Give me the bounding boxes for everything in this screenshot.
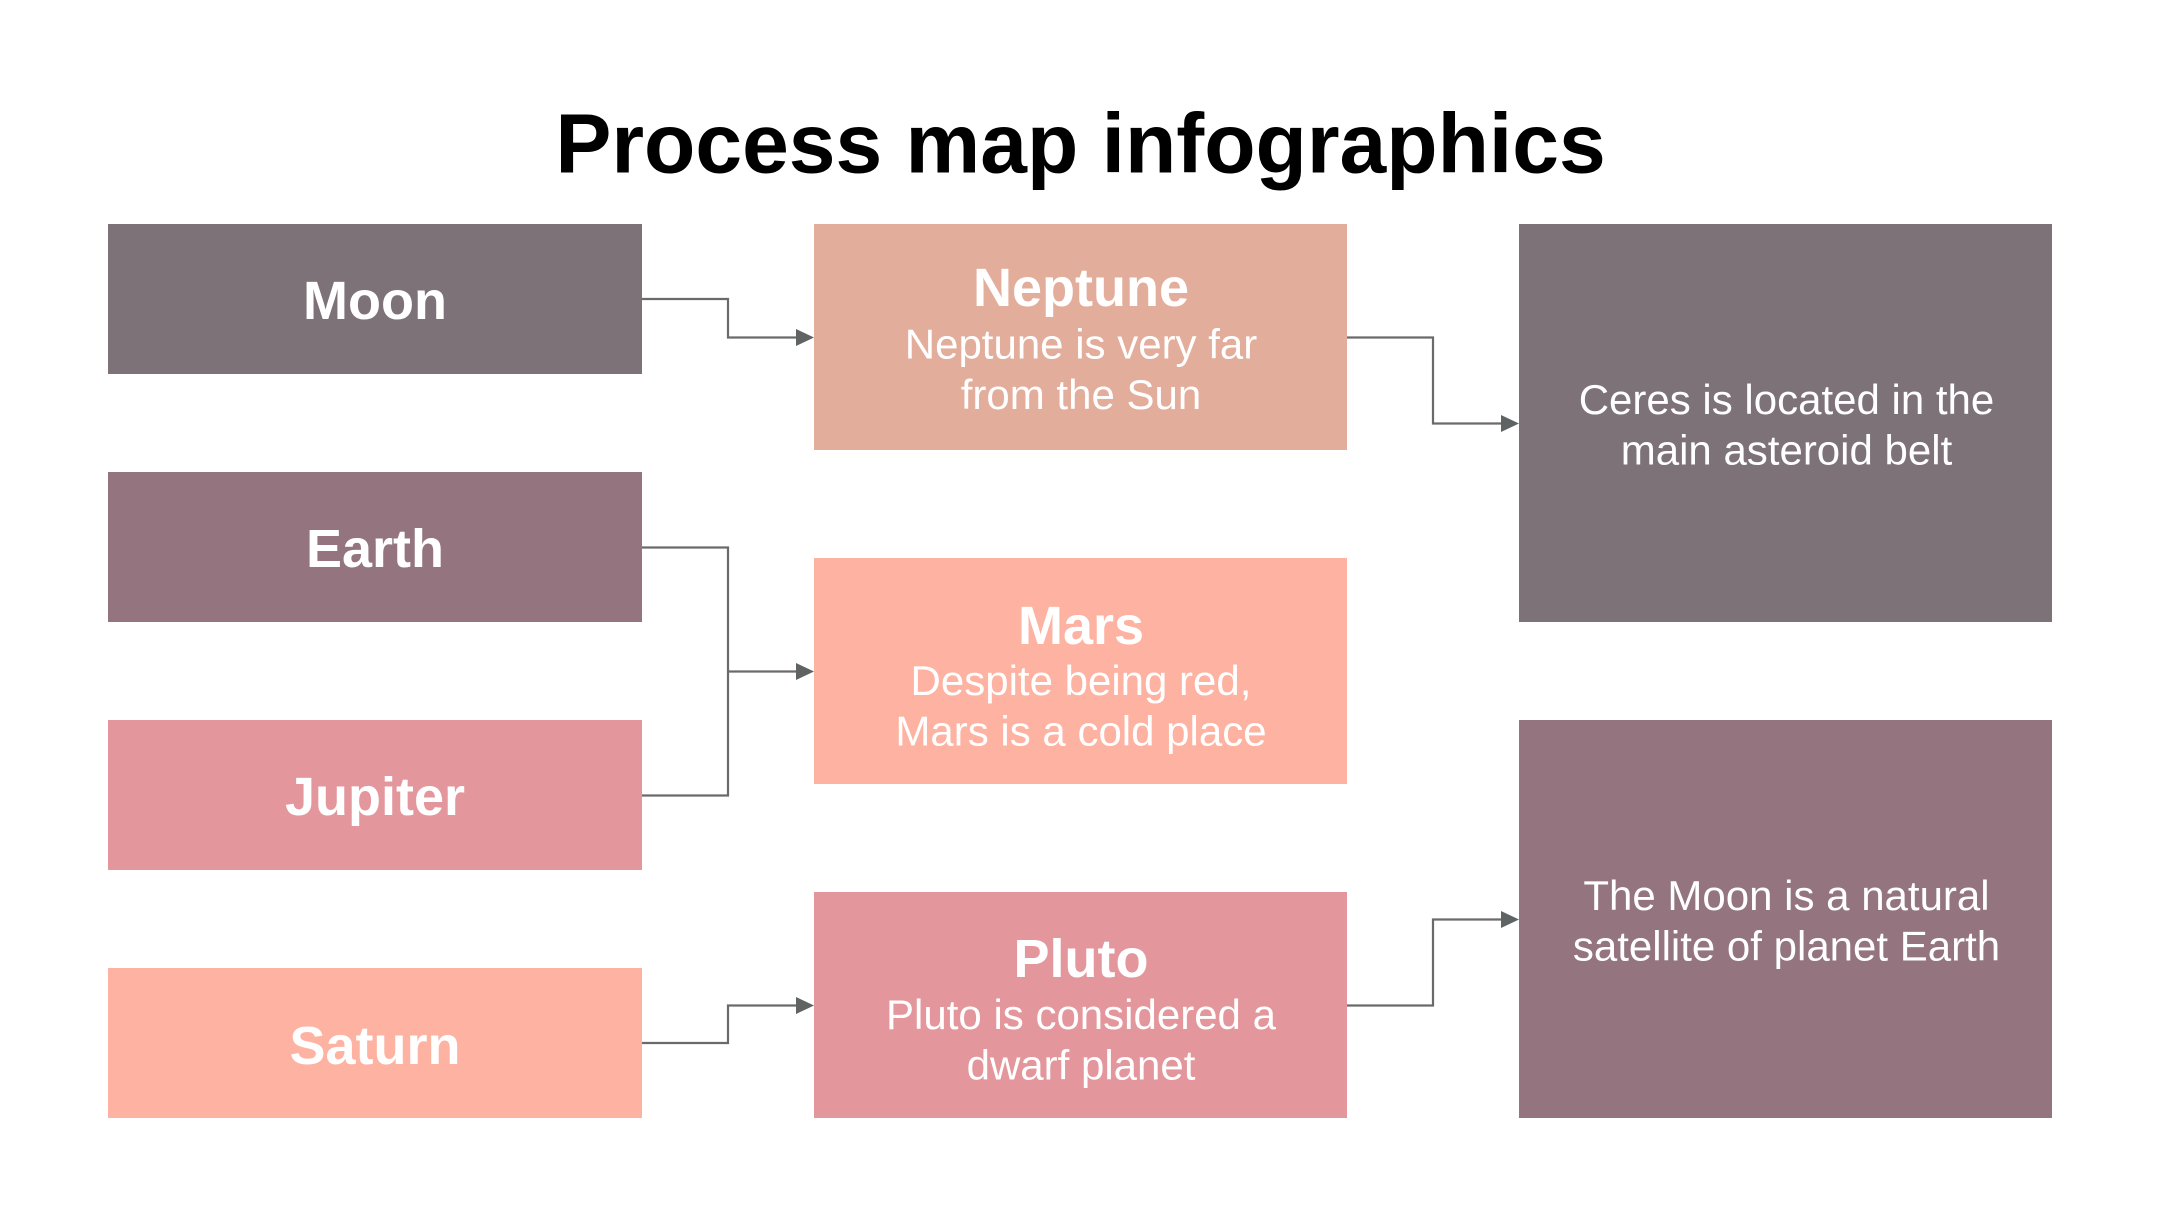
panel: Mars [814, 558, 1347, 784]
panel: Neptune: from the Sun [961, 371, 1201, 418]
arrow: Saturn to Pluto [642, 997, 814, 1043]
panel: Saturn [108, 968, 642, 1118]
panel: Pluto: Pluto [1014, 929, 1148, 989]
panel: Moon: Moon [303, 271, 447, 331]
arrow: Moon to Neptune [642, 299, 814, 346]
panel: Ceres [1519, 224, 2052, 622]
panel: Jupiter [108, 720, 642, 870]
panel: Pluto [814, 892, 1347, 1118]
arrow: Neptune to Ceres [1347, 338, 1519, 432]
panel: Saturn: Saturn [289, 1016, 461, 1076]
panel: Pluto: dwarf planet [967, 1042, 1196, 1088]
panel: Earth [108, 472, 642, 622]
panel: Mars: Mars is a cold place [895, 708, 1267, 754]
panel: Moon satellite [1519, 720, 2052, 1118]
panel: Moon satellite: satellite of planet Earth [1573, 922, 2000, 970]
panel: Jupiter: Jupiter [285, 767, 465, 827]
panel: Pluto: Pluto is considered a [886, 991, 1277, 1038]
panel: Mars: Despite being red, [911, 657, 1251, 704]
panel: Neptune: Neptune is very far [905, 320, 1257, 368]
panel: Ceres: main asteroid belt [1621, 426, 1953, 474]
panel: Neptune [814, 224, 1347, 450]
arrow: Pluto to Moon satellite [1347, 911, 1519, 1006]
panel: Neptune: Neptune [973, 258, 1189, 318]
panel: Mars: Mars [1018, 596, 1144, 656]
title: Process map infographics [555, 96, 1606, 190]
panel: Moon satellite: The Moon is a natural [1583, 872, 1990, 919]
panel: Ceres: Ceres is located in the [1579, 376, 1994, 423]
arrow: Earth and Jupiter to Mars [642, 548, 814, 796]
panel: Earth: Earth [306, 519, 444, 579]
panel: Moon [108, 224, 642, 374]
